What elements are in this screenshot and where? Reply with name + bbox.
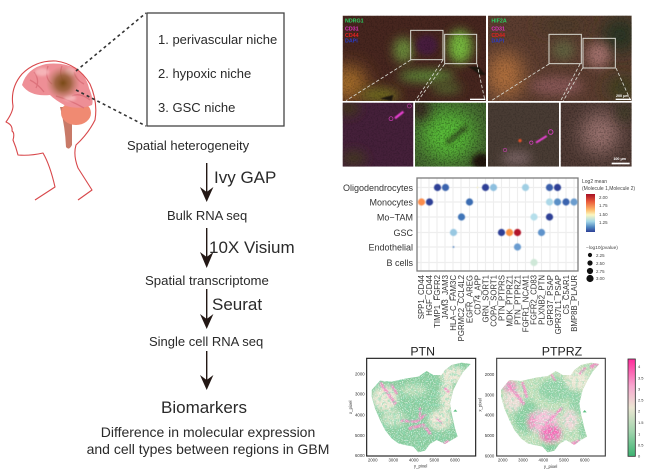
row labels: Mo−TAM bbox=[377, 212, 413, 222]
image: HIF2A zoom, hypoxic bbox=[561, 102, 633, 167]
PTN axes: x_pixel bbox=[348, 400, 353, 414]
PTN tissue bbox=[372, 362, 470, 452]
scale bars: 100 μm bbox=[613, 157, 627, 161]
PTPRZ axes: 3000 bbox=[485, 392, 495, 397]
size legend: 2.25 bbox=[596, 253, 605, 258]
column labels: HLA−C_FAM3C bbox=[449, 275, 458, 331]
stain legend: NDRG1: CD44 bbox=[345, 33, 359, 39]
stain legend: NDRG1: CD31 bbox=[345, 26, 359, 32]
column labels: PGRMC2_CCL4L2 bbox=[457, 275, 466, 341]
niche items bbox=[158, 32, 277, 115]
size legend: −log10(pvalue) bbox=[586, 245, 618, 251]
column labels: GPR37_PSAP bbox=[546, 275, 555, 326]
scale bars bbox=[470, 94, 631, 164]
cerebrum bbox=[22, 64, 93, 108]
zoom boxes and connector lines bbox=[346, 30, 631, 101]
column labels: GRN_SORT1 bbox=[482, 275, 490, 323]
PTN axes: 3000 bbox=[355, 392, 365, 397]
PTPRZ axes: 5000 bbox=[485, 433, 495, 438]
colour bar: 1.5 bbox=[638, 420, 644, 425]
scale bars: 200 μm bbox=[616, 94, 629, 98]
image: NDRG1 overview bbox=[330, 16, 486, 102]
step: bulk RNA seq: Bulk RNA seq bbox=[167, 208, 247, 223]
summary text: and cell types between regions in GBM bbox=[87, 441, 329, 457]
image: HIF2A zoom, vessel bbox=[488, 103, 559, 167]
PTN axes: 5000 bbox=[430, 458, 440, 463]
PTPRZ axes: 2000 bbox=[485, 372, 495, 377]
PTPRZ axes: 2000 bbox=[498, 458, 508, 463]
colour legend: 1.25 bbox=[599, 220, 608, 225]
PTN axes: y_pixel bbox=[414, 464, 427, 469]
colour bar: 4 bbox=[638, 364, 641, 369]
title: PTN: PTN bbox=[410, 344, 435, 358]
arrow: to single cell bbox=[200, 289, 213, 329]
niche list box bbox=[147, 13, 284, 126]
tumor bbox=[46, 66, 80, 100]
column labels: TIMP1_FGFR2 bbox=[433, 275, 442, 328]
panel: immunofluorescence images bbox=[330, 16, 638, 170]
PTPRZ axes: 3000 bbox=[518, 458, 528, 463]
niche items: 3. GSC niche bbox=[158, 100, 235, 115]
PTN axes: 5000 bbox=[355, 433, 365, 438]
column labels: PLXNB2_PTN bbox=[538, 275, 546, 325]
PTPRZ axes: 5000 bbox=[559, 458, 569, 463]
icon: head with brain and tumor bbox=[6, 61, 96, 200]
step: spatial transcriptome: Spatial transcriptome bbox=[145, 273, 269, 288]
row labels: Oligodendrocytes bbox=[343, 183, 413, 193]
image: NDRG1 zoom, hypoxic bbox=[415, 102, 486, 167]
colour legend bbox=[582, 179, 635, 232]
colour bar: 3 bbox=[638, 386, 641, 391]
row labels: Endothelial bbox=[368, 242, 413, 252]
column labels: SPP1_CD44 bbox=[417, 274, 426, 319]
colour bar: 1 bbox=[638, 432, 641, 437]
column labels: EGFR_AREG bbox=[466, 275, 474, 323]
niche items: 1. perivascular niche bbox=[158, 32, 277, 47]
size legend: 3.00 bbox=[596, 276, 605, 281]
chart: PTPRZ map bbox=[477, 344, 608, 469]
image: HIF2A overview bbox=[487, 16, 638, 101]
colour legend: (Molecule 1,Molecule 2) bbox=[582, 186, 635, 192]
PTPRZ axes: 4000 bbox=[485, 413, 495, 418]
colour bar: 2 bbox=[638, 409, 641, 414]
PTN axes: 6000 bbox=[450, 458, 460, 463]
summary text bbox=[87, 424, 329, 457]
PTN axes: 2000 bbox=[355, 371, 365, 376]
colour legend: 1.75 bbox=[599, 203, 608, 208]
stain legend: HIF2A: DAPI bbox=[491, 39, 505, 45]
chart: PTN map bbox=[348, 344, 477, 469]
stain legend: NDRG1: NDRG1 bbox=[345, 19, 364, 25]
stain legend: HIF2A: HIF2A bbox=[491, 19, 507, 25]
title: PTPRZ: PTPRZ bbox=[542, 344, 583, 358]
stain legend: NDRG1 bbox=[345, 19, 364, 45]
PTPRZ axes: y_pixel bbox=[544, 464, 557, 469]
PTN axes: 2000 bbox=[368, 458, 378, 463]
colour bar: 3.5 bbox=[638, 375, 644, 380]
column labels: PTN_PTPRS bbox=[498, 275, 506, 321]
arrow: to bulk RNA seq bbox=[200, 163, 213, 202]
niche items: 2. hypoxic niche bbox=[158, 66, 251, 81]
PTN axes: 3000 bbox=[389, 458, 399, 463]
step: single cell RNA seq: Single cell RNA seq bbox=[149, 334, 263, 349]
image: NDRG1 zoom, vessel bbox=[342, 102, 414, 167]
label: Ivy GAP: Ivy GAP bbox=[214, 168, 276, 187]
size legend: 2.75 bbox=[596, 269, 605, 274]
column labels: PTN_PTPRZ1 bbox=[514, 275, 522, 325]
row labels bbox=[343, 183, 413, 268]
dots bbox=[418, 184, 578, 266]
cerebellum bbox=[61, 101, 91, 125]
column labels: JAM3_JAM3 bbox=[441, 275, 450, 319]
column labels: HGF_CD44 bbox=[425, 274, 434, 316]
column labels bbox=[417, 274, 579, 341]
row labels: GSC bbox=[393, 228, 413, 238]
summary text: Difference in molecular expression bbox=[101, 424, 315, 440]
PTN axes: 4000 bbox=[409, 458, 419, 463]
row labels: Monocytes bbox=[369, 198, 413, 208]
colour legend: 2.00 bbox=[599, 195, 608, 200]
brain stem bbox=[60, 107, 72, 149]
column labels: COPA_SORT1 bbox=[490, 275, 498, 327]
column labels: GPR37L1_PSAP bbox=[554, 275, 563, 334]
colour legend: 1.50 bbox=[599, 212, 608, 217]
column labels: BMP8B_PLAUR bbox=[570, 275, 579, 332]
column labels: MDK_PTPRZ1 bbox=[506, 275, 514, 327]
column labels: CD74_APP bbox=[474, 275, 482, 315]
plot frame and grid bbox=[417, 178, 578, 271]
PTPRZ axes: 6000 bbox=[580, 458, 590, 463]
column labels: C5_C5AR1 bbox=[562, 275, 571, 314]
size legend bbox=[586, 245, 618, 282]
arrow: to biomarkers bbox=[200, 351, 213, 390]
stain legend: NDRG1: DAPI bbox=[345, 39, 358, 45]
PTPRZ axes bbox=[477, 372, 590, 469]
colour bar: 0 bbox=[638, 454, 641, 459]
PTPRZ tissue bbox=[501, 362, 600, 452]
heading: spatial heterogeneity: Spatial heterogeneity bbox=[127, 138, 250, 153]
dashed callout lines bbox=[76, 13, 146, 126]
stain legend: HIF2A bbox=[491, 19, 507, 45]
colour bar bbox=[628, 359, 644, 459]
PTPRZ axes: 6000 bbox=[485, 453, 495, 458]
panel: spatial expression maps bbox=[348, 344, 644, 469]
column labels: FGFR2_CD83 bbox=[530, 275, 538, 325]
column labels: FGFR1_NCAM1 bbox=[522, 275, 530, 332]
row labels: B cells bbox=[386, 258, 413, 268]
size legend: 2.50 bbox=[596, 261, 605, 266]
PTPRZ axes: x_pixel bbox=[477, 398, 482, 412]
PTN axes: 4000 bbox=[355, 412, 365, 417]
PTN axes bbox=[348, 371, 460, 469]
colour bar: 0.5 bbox=[638, 443, 644, 448]
stain legend: HIF2A: CD31 bbox=[491, 26, 505, 32]
PTPRZ axes: 4000 bbox=[539, 458, 549, 463]
chart: ligand-receptor dot plot bbox=[343, 178, 635, 341]
label: 10X Visium: 10X Visium bbox=[209, 238, 295, 257]
label: Seurat: Seurat bbox=[212, 295, 262, 314]
heading: biomarkers: Biomarkers bbox=[161, 398, 247, 417]
PTN axes: 6000 bbox=[355, 453, 365, 458]
colour legend: Log2 mean bbox=[582, 179, 607, 185]
head outline bbox=[6, 61, 96, 200]
stain legend: HIF2A: CD44 bbox=[491, 33, 505, 39]
colour bar: 2.5 bbox=[638, 397, 644, 402]
arrow: to spatial transcriptome bbox=[200, 228, 213, 268]
